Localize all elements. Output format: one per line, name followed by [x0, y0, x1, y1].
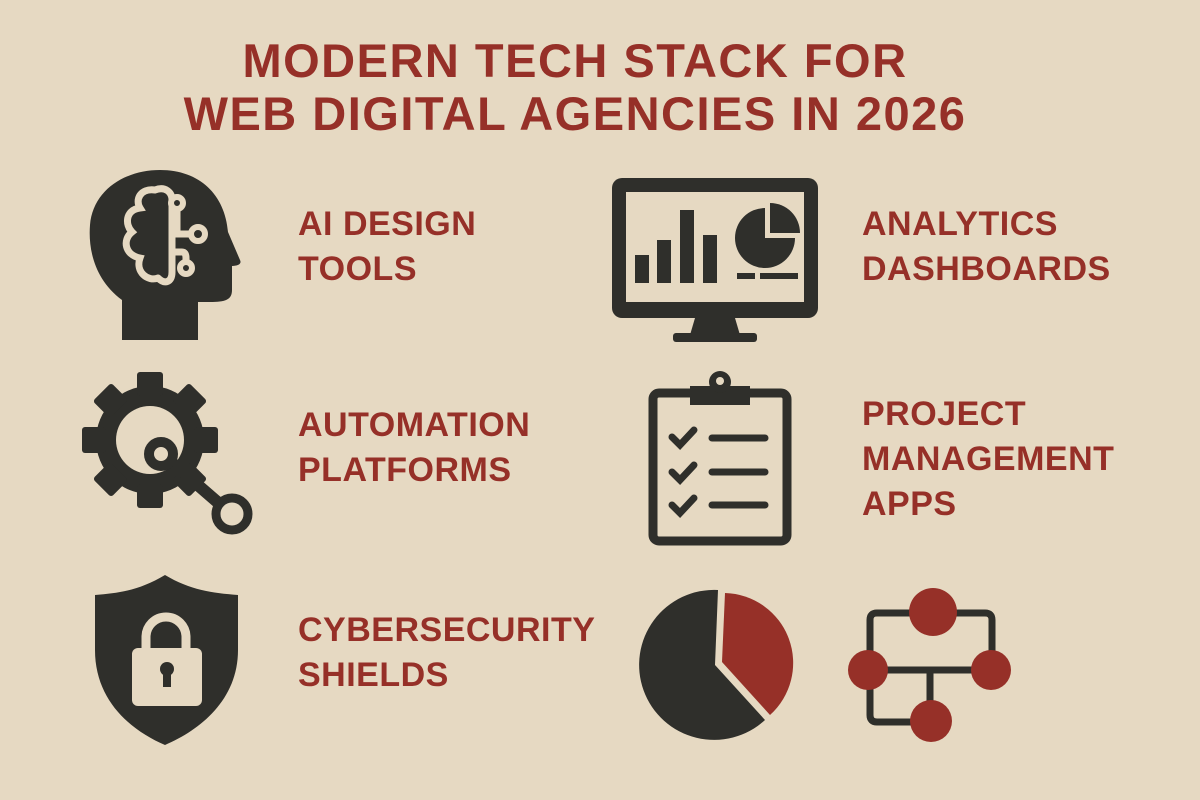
label: cybersecurity shields: SHIELDS	[298, 656, 449, 694]
label: analytics dashboards	[862, 205, 1111, 288]
icon: head with brain	[90, 170, 241, 340]
label: ai design tools	[298, 205, 476, 288]
title: MODERN TECH STACK FOR	[242, 34, 908, 87]
icon: clipboard checklist	[653, 371, 787, 541]
icon: security shield with lock	[95, 575, 238, 745]
icon: network diagram	[848, 588, 1011, 742]
label: analytics dashboards: DASHBOARDS	[862, 250, 1111, 288]
label: ai design tools: AI DESIGN	[298, 205, 476, 243]
icon: analytics monitor	[612, 178, 818, 342]
label: automation platforms: AUTOMATION	[298, 406, 530, 444]
icon: gear with key	[54, 344, 248, 536]
label: project management apps: PROJECT	[862, 395, 1026, 433]
label: analytics dashboards: ANALYTICS	[862, 205, 1058, 243]
title	[184, 34, 966, 140]
label: ai design tools: TOOLS	[298, 250, 417, 288]
label: cybersecurity shields: CYBERSECURITY	[298, 611, 595, 649]
label: project management apps: APPS	[862, 485, 957, 523]
label: automation platforms: PLATFORMS	[298, 451, 512, 489]
label: automation platforms	[298, 406, 530, 489]
label: cybersecurity shields	[298, 611, 595, 694]
title: WEB DIGITAL AGENCIES IN 2026	[184, 87, 966, 140]
label: project management apps: MANAGEMENT	[862, 440, 1114, 478]
icon: pie chart	[639, 590, 793, 740]
label: project management apps	[862, 395, 1114, 523]
